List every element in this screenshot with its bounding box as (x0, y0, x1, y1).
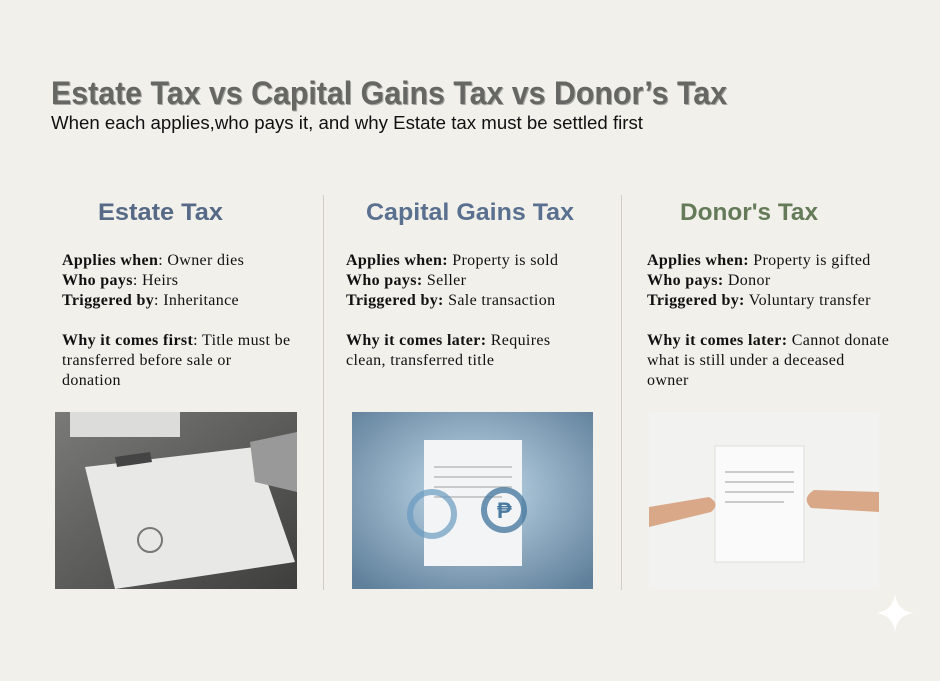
heading: capital gains tax: Capital Gains Tax (366, 199, 575, 226)
text: capital gains (346, 252, 558, 369)
text: donor: what is still under a deceased (647, 352, 845, 369)
text: estate: transferred before sale or (62, 352, 231, 369)
text: estate: Who pays: Heirs (62, 272, 178, 289)
text: donor: owner (647, 372, 689, 389)
text: donor (647, 252, 889, 389)
text: donor: Why it comes later: Cannot donate (647, 332, 889, 349)
image: document with exchange arrows (352, 412, 593, 589)
text: capital gains: Who pays: Seller (346, 272, 466, 289)
text: donor: Who pays: Donor (647, 272, 770, 289)
text: estate: donation (62, 372, 121, 389)
icon: sparkle (877, 595, 913, 631)
image: document with exchange arrows: ₱ (497, 498, 512, 523)
text: estate: Triggered by: Inheritance (62, 292, 239, 309)
text: donor: Applies when: Property is gifted (647, 252, 871, 269)
text: estate: Why it comes first: Title must be (62, 332, 290, 349)
heading: donor's tax: Donor's Tax (680, 199, 819, 226)
text: estate: Applies when: Owner dies (62, 252, 244, 269)
title: When each applies,who pays it, and why Estate tax must be settled first (51, 113, 643, 133)
title: Estate Tax vs Capital Gains Tax vs Donor’s Tax (52, 76, 728, 112)
title: Estate Tax vs Capital Gains Tax vs Donor’s Tax (51, 75, 727, 111)
image: clipboard document (55, 412, 297, 589)
image: hands passing document (649, 446, 879, 562)
text: capital gains: Triggered by: Sale transaction (346, 292, 555, 309)
text: estate (62, 252, 290, 389)
heading: estate tax: Estate Tax (98, 199, 224, 226)
title (51, 75, 728, 133)
text: donor: Triggered by: Voluntary transfer (647, 292, 871, 309)
text: capital gains: clean, transferred title (346, 352, 494, 369)
text: capital gains: Applies when: Property is sold (346, 252, 558, 269)
text: capital gains: Why it comes later: Requires (346, 332, 550, 349)
